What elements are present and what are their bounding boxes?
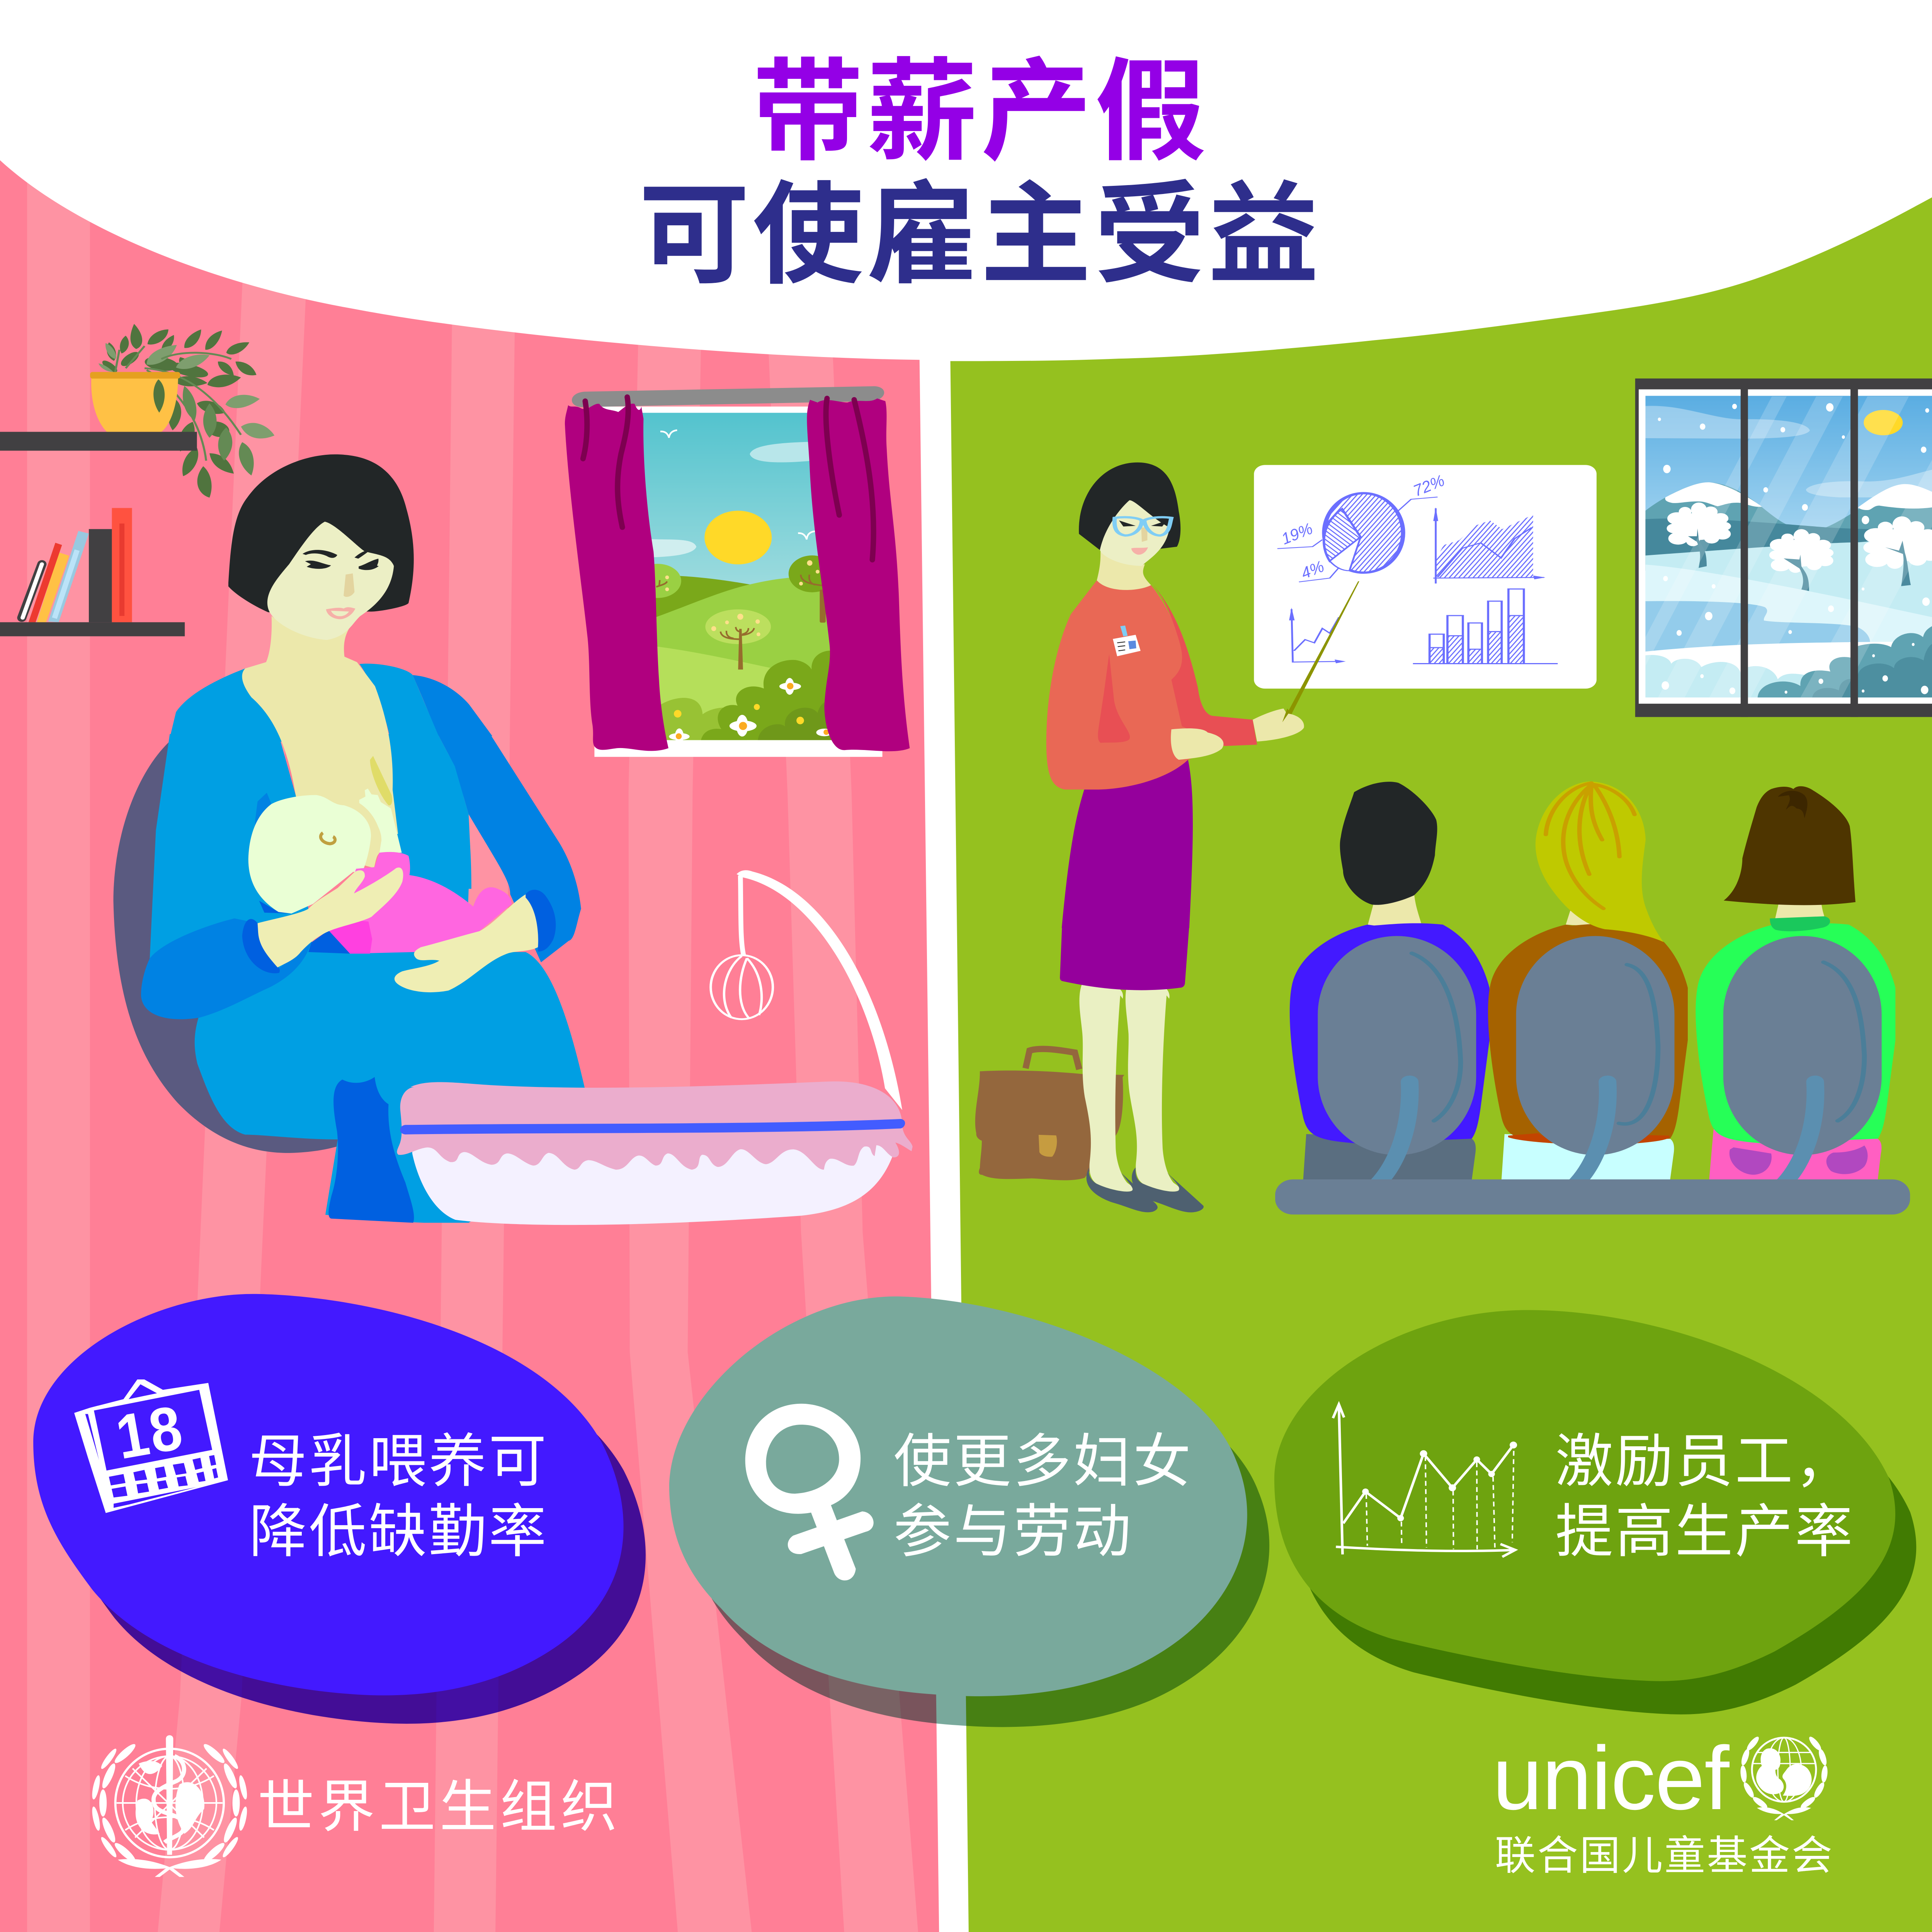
text: callout 2: 参与劳动 xyxy=(893,1499,1133,1564)
light beams xyxy=(1645,396,1932,697)
trees xyxy=(634,555,836,670)
hills xyxy=(633,575,839,740)
callout: more women in workforce xyxy=(669,1296,1269,1727)
chest shadow xyxy=(370,756,392,805)
winter window xyxy=(1635,379,1932,717)
WHO name: 世界卫生组织 xyxy=(258,1776,621,1839)
pointer xyxy=(1282,581,1359,722)
lap, baby and arms xyxy=(141,756,585,1223)
WHO emblem xyxy=(90,1735,248,1877)
window with spring landscape xyxy=(565,386,910,757)
trees in snow xyxy=(1667,502,1932,591)
chart percent labels: 4% xyxy=(1298,557,1327,582)
mobile arm xyxy=(736,870,902,1110)
face xyxy=(267,522,394,640)
lap xyxy=(193,952,585,1223)
title: 带薪产假 xyxy=(752,50,1209,174)
neck and chest xyxy=(242,616,398,834)
snowflakes xyxy=(1658,403,1930,694)
person 1 xyxy=(1290,782,1490,1185)
right panel background xyxy=(950,123,1932,1932)
pie chart xyxy=(1277,493,1437,582)
clouds and birds xyxy=(644,430,815,558)
icon: female symbol xyxy=(745,1404,874,1580)
shelves, books and plant xyxy=(0,324,274,636)
icon: line chart xyxy=(1333,1404,1517,1557)
person 3 xyxy=(1696,786,1895,1185)
text: callout 3: 激励员工， xyxy=(1555,1429,1855,1494)
text: callout 3: 提高生产率 xyxy=(1555,1499,1855,1564)
icon: calendar 18 xyxy=(74,1379,228,1513)
baby crib with mobile xyxy=(397,870,913,1225)
lower shelf xyxy=(0,622,185,636)
text: callout 2 xyxy=(893,1429,1193,1564)
person 2 xyxy=(1488,781,1688,1185)
presentation board with charts xyxy=(1254,465,1597,689)
title: 可使雇主受益 xyxy=(639,173,1322,297)
hands xyxy=(258,867,403,968)
id badge xyxy=(1113,626,1141,656)
left shoulder xyxy=(169,668,293,742)
left curtain xyxy=(565,397,668,751)
sun xyxy=(704,511,772,565)
mullions xyxy=(1741,379,1858,717)
foot xyxy=(328,1077,414,1223)
bushes and flowers xyxy=(655,651,837,743)
callout: breastfeeding lowers absenteeism xyxy=(33,1294,646,1724)
title banner xyxy=(0,0,1932,361)
UNICEF name: 联合国儿童基金会 xyxy=(1495,1833,1834,1878)
near sleeve xyxy=(141,918,311,1019)
left panel background xyxy=(0,0,951,1932)
unicef wordmark: unicef xyxy=(1492,1728,1730,1828)
chart percent labels: 72% xyxy=(1410,471,1447,500)
mobile toy xyxy=(711,876,773,1019)
right curtain xyxy=(807,398,910,751)
briefcase xyxy=(975,1049,1124,1180)
pot xyxy=(90,372,180,432)
area chart xyxy=(1433,507,1546,583)
hands xyxy=(1171,709,1304,760)
right lapel xyxy=(359,664,471,889)
baby xyxy=(248,789,512,954)
callout: motivated staff, higher productivity xyxy=(1274,1310,1916,1714)
text: callout 1: 母乳喂养可 xyxy=(249,1429,548,1494)
UNICEF emblem xyxy=(1740,1735,1828,1820)
hair and upper dress xyxy=(169,454,492,889)
far sleeve top xyxy=(413,675,492,736)
curtain rod xyxy=(572,386,884,407)
text: callout 3 xyxy=(1555,1429,1855,1564)
skirt xyxy=(1062,760,1193,928)
armchair xyxy=(113,742,339,1153)
skirt hem xyxy=(1060,925,1189,990)
crib canopy xyxy=(397,1082,913,1170)
hair xyxy=(228,454,414,612)
text: callout 2: 使更多妇女 xyxy=(893,1429,1193,1494)
white divider strip xyxy=(919,345,969,1932)
mother nursing baby in armchair xyxy=(113,454,585,1223)
books xyxy=(22,508,132,622)
far sleeve and torso xyxy=(150,734,581,962)
bench xyxy=(1275,1179,1910,1214)
WHO logo xyxy=(90,1735,621,1877)
text: callout 1 xyxy=(249,1429,548,1564)
head xyxy=(1079,463,1180,590)
plant xyxy=(99,324,274,498)
crib basket xyxy=(412,1129,894,1225)
text: callout 1: 降低缺勤率 xyxy=(249,1499,548,1564)
upper shelf xyxy=(0,432,197,451)
sweater xyxy=(1046,580,1256,789)
line chart xyxy=(1289,607,1346,663)
UNICEF logo xyxy=(1492,1728,1834,1878)
shoes xyxy=(1087,1168,1204,1213)
bar chart xyxy=(1413,589,1558,663)
seated audience from behind xyxy=(1275,781,1910,1214)
title xyxy=(639,50,1322,297)
crib band xyxy=(400,1119,905,1134)
callout: breastfeeding lowers absenteeism: 18 xyxy=(111,1392,189,1472)
presenter woman xyxy=(975,463,1359,1213)
legs xyxy=(1079,985,1133,1192)
chest and face xyxy=(242,522,398,834)
winter landscape xyxy=(1645,396,1932,697)
window frame xyxy=(1635,379,1932,717)
chart percent labels: 19% xyxy=(1279,519,1315,548)
chart percent labels xyxy=(1279,471,1447,582)
